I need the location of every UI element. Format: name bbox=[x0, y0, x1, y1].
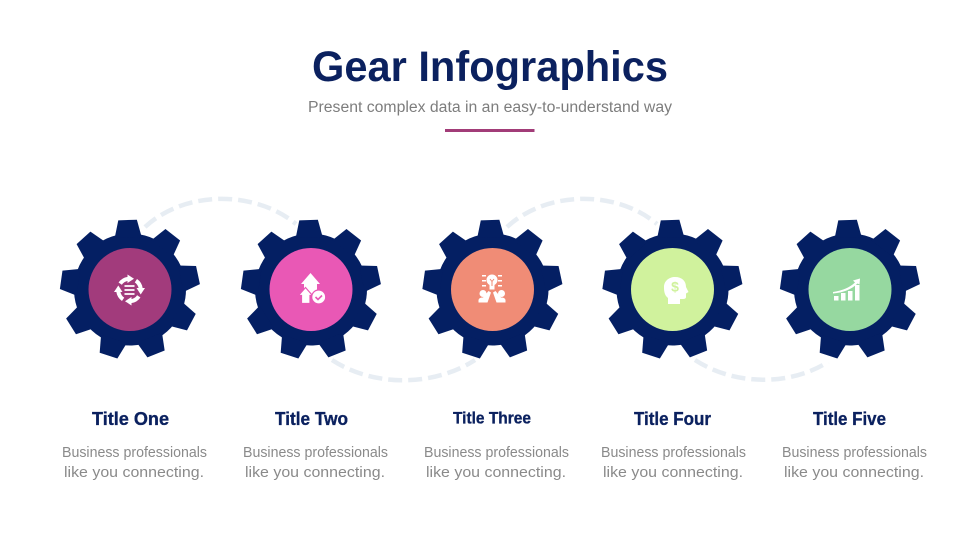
label 1 bbox=[62, 409, 207, 481]
label 4: Title Four bbox=[634, 409, 711, 429]
gear 4 bbox=[599, 218, 746, 362]
icon: arrows with check bbox=[298, 273, 326, 304]
gear 3 bbox=[419, 218, 566, 362]
label 2: Title Two bbox=[275, 409, 348, 429]
label 5: Title Five bbox=[813, 409, 886, 429]
label 2: like you connecting. bbox=[245, 464, 385, 481]
label 4 bbox=[601, 409, 746, 481]
label 3 bbox=[424, 410, 569, 481]
icon: bar chart growth bbox=[833, 278, 860, 300]
label 4: Business professionals bbox=[601, 444, 746, 461]
label 4: like you connecting. bbox=[603, 464, 743, 481]
label 1: Title One bbox=[92, 409, 169, 429]
label 3: Title Three bbox=[453, 410, 531, 428]
label 5 bbox=[782, 409, 927, 481]
dashed connector arcs bbox=[145, 199, 828, 380]
label 3: like you connecting. bbox=[426, 464, 566, 481]
icon: head with dollar: $ bbox=[671, 278, 679, 294]
icon: people and lightbulb bbox=[478, 274, 506, 302]
label 5: Business professionals bbox=[782, 444, 927, 461]
label 1: Business professionals bbox=[62, 444, 207, 461]
label 5: like you connecting. bbox=[784, 464, 924, 481]
label 1: like you connecting. bbox=[64, 464, 204, 481]
label 2: Business professionals bbox=[243, 444, 388, 461]
title: Gear Infographics bbox=[312, 43, 668, 91]
gear 1 bbox=[57, 218, 203, 362]
icon: head with dollar bbox=[664, 277, 688, 304]
gear 2 bbox=[238, 218, 384, 362]
gear 5 bbox=[777, 218, 923, 362]
icon: cycle with list bbox=[114, 274, 145, 306]
label 2 bbox=[243, 409, 388, 481]
subtitle: Present complex data in an easy-to-understand way bbox=[308, 99, 672, 116]
title underline bbox=[445, 129, 534, 132]
label 3: Business professionals bbox=[424, 444, 569, 461]
